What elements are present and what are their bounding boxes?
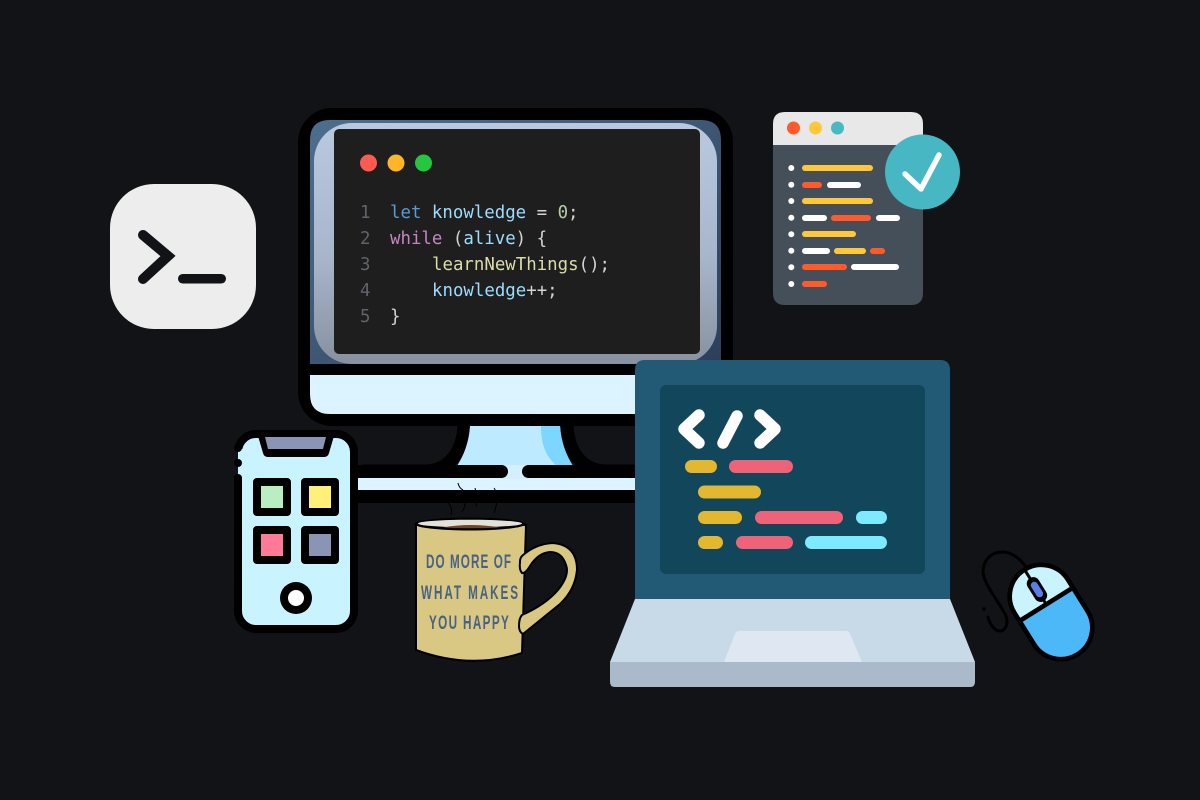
- mug rim: [414, 518, 526, 530]
- monitor screen: [310, 120, 721, 364]
- line numbers: 2: [360, 229, 370, 249]
- laptop screen: [660, 385, 925, 574]
- code text: while (alive) {: [390, 229, 547, 249]
- monitor stand and base: [350, 425, 650, 503]
- monitor frame: [298, 108, 733, 426]
- code text: }: [390, 307, 400, 327]
- icon: checklist window: [773, 112, 960, 305]
- laptop keyboard deck: [610, 599, 975, 662]
- icon: computer mouse: [982, 552, 1104, 671]
- check badge: [885, 134, 960, 210]
- coffee mug: [414, 483, 577, 661]
- laptop: [610, 360, 975, 687]
- steam: [448, 483, 497, 515]
- code window: [334, 129, 700, 354]
- icon: terminal: [110, 184, 256, 329]
- screen glow: [314, 123, 717, 364]
- mug text: DO MORE OF: [426, 551, 511, 573]
- line numbers: 4: [360, 281, 370, 301]
- icon: smartphone: [233, 434, 354, 629]
- code text: let knowledge = 0;: [390, 203, 579, 223]
- code text: knowledge++;: [432, 281, 558, 301]
- monitor chin: [310, 375, 721, 414]
- mug body: [416, 525, 526, 661]
- mug text line 3: YOU HAPPY: [429, 612, 509, 634]
- line numbers: 1: [360, 203, 370, 223]
- desktop monitor: [298, 108, 733, 503]
- mouse cable: [983, 552, 1028, 631]
- line numbers: 3: [360, 255, 370, 275]
- laptop lid: [635, 360, 950, 600]
- code bars: [685, 460, 887, 549]
- laptop front edge: [610, 662, 975, 687]
- code text: learnNewThings();: [432, 255, 610, 275]
- line numbers: 5: [360, 307, 370, 327]
- trackpad: [724, 631, 862, 662]
- mug text line 2: WHAT MAKES: [421, 582, 518, 604]
- mug handle: [519, 543, 577, 634]
- window controls: [360, 154, 432, 172]
- code symbol: [684, 415, 775, 443]
